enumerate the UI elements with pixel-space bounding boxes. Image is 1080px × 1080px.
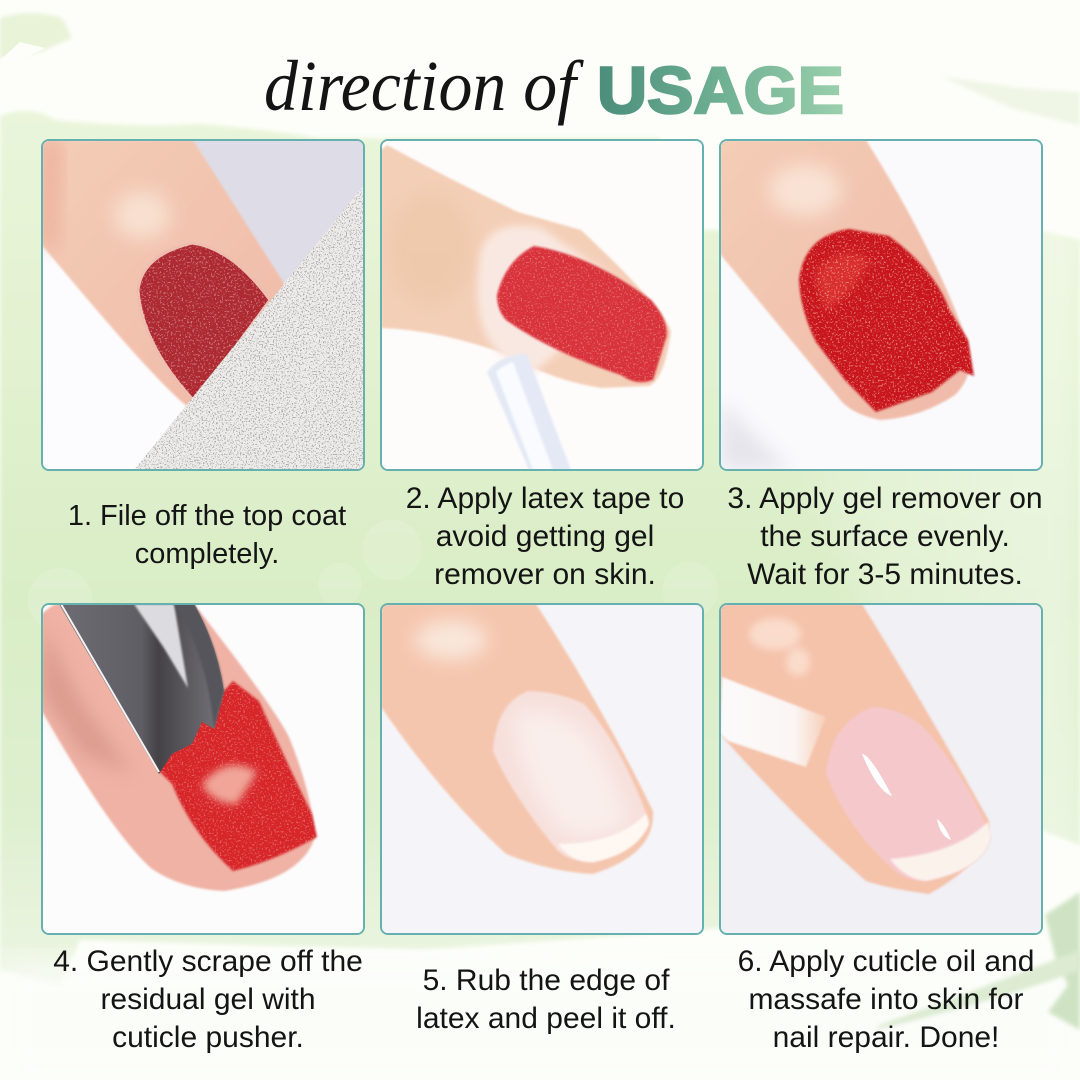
nail polish	[138, 243, 270, 402]
finger	[42, 604, 315, 891]
caption: step 4: cuticle pusher.	[112, 1021, 304, 1054]
caption: step 4	[53, 945, 363, 1054]
caption: step 1: 1. File off the top coat	[68, 500, 346, 532]
finger	[720, 140, 970, 420]
metal pusher	[59, 604, 224, 774]
caption: step 5: latex and peel it off.	[416, 1002, 676, 1035]
caption: step 6: 6. Apply cuticle oil and	[738, 945, 1034, 978]
caption: step 6: nail repair. Done!	[773, 1021, 999, 1054]
red gel	[157, 681, 317, 871]
cotton pad	[720, 677, 826, 767]
title: direction of	[264, 46, 584, 126]
red nail	[497, 246, 667, 382]
caption: step 5	[416, 964, 676, 1035]
finger	[720, 604, 989, 894]
nail file	[134, 185, 364, 470]
caption: step 4: 4. Gently scrape off the	[53, 945, 363, 978]
nail shine marks	[862, 754, 892, 796]
caption: step 6	[738, 945, 1034, 1054]
glossy nail	[826, 707, 991, 881]
panel: step 5 photo, peeled clean nail	[380, 603, 704, 935]
caption: step 2: 2. Apply latex tape to	[406, 482, 684, 515]
bubbling gel	[799, 229, 974, 412]
panel: step 3 photo, gel remover	[719, 139, 1043, 471]
latex brush	[487, 354, 571, 470]
caption: step 2: remover on skin.	[434, 558, 656, 591]
finger	[381, 604, 653, 874]
panel: step 6 photo, cuticle oil	[719, 603, 1043, 935]
caption: step 2	[406, 482, 684, 591]
finger	[381, 145, 671, 388]
caption: step 3: Wait for 3-5 minutes.	[747, 558, 1023, 591]
panel: step 2 photo, latex tape	[380, 139, 704, 471]
bare nail	[493, 691, 649, 862]
finger	[42, 140, 292, 410]
caption: step 3: the surface evenly.	[760, 520, 1010, 553]
caption: step 2: avoid getting gel	[436, 520, 654, 553]
caption: step 1: completely.	[135, 538, 279, 570]
caption: step 3	[727, 482, 1043, 591]
panel: step 1 photo, filing the top coat	[41, 139, 365, 471]
caption: step 5: 5. Rub the edge of	[423, 964, 669, 997]
latex film	[477, 226, 631, 375]
title	[264, 46, 844, 126]
caption: step 3: 3. Apply gel remover on	[727, 482, 1043, 515]
title: USAGE	[597, 53, 844, 126]
caption: step 1	[68, 500, 346, 570]
panel: step 4 photo, cuticle pusher	[41, 603, 365, 935]
caption: step 4: residual gel with	[100, 983, 316, 1016]
caption: step 6: massafe into skin for	[748, 983, 1024, 1016]
grey backdrop	[190, 140, 364, 285]
